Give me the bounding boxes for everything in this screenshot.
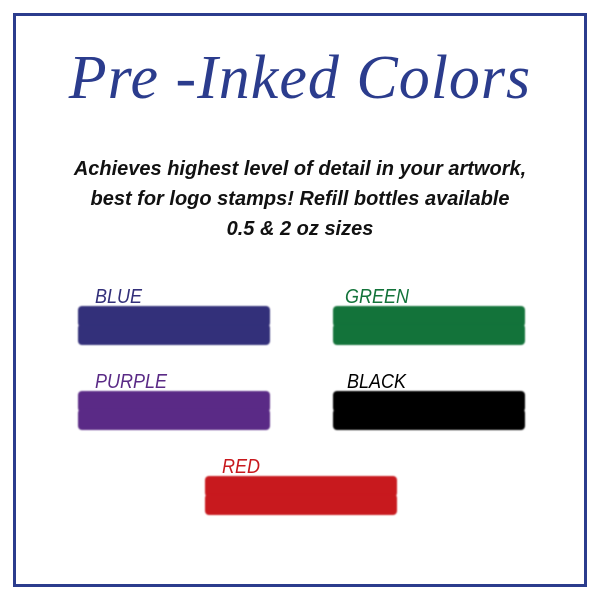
subtitle text: 0.5 & 2 oz sizes: [227, 218, 373, 240]
subtitle text: best for logo stamps! Refill bottles available: [90, 188, 509, 210]
swatch: blue: [77, 286, 271, 346]
swatch: red: [204, 456, 398, 516]
stroke: green: [332, 305, 526, 346]
swatch: black: [332, 371, 526, 432]
label: red: RED: [222, 456, 260, 478]
subtitle text: [74, 158, 526, 240]
swatch: green: [332, 286, 526, 346]
stroke: purple: [77, 390, 271, 431]
stroke: blue: [77, 305, 271, 346]
label: blue: BLUE: [95, 286, 142, 308]
label: black: BLACK: [347, 371, 406, 393]
stroke: red: [204, 475, 398, 516]
title: Pre -Inked Colors: [69, 44, 531, 112]
label: green: GREEN: [345, 286, 409, 308]
swatch: purple: [77, 371, 271, 431]
stroke: black: [332, 390, 526, 432]
label: purple: PURPLE: [95, 371, 167, 393]
subtitle text: Achieves highest level of detail in your artwork,: [74, 158, 526, 180]
